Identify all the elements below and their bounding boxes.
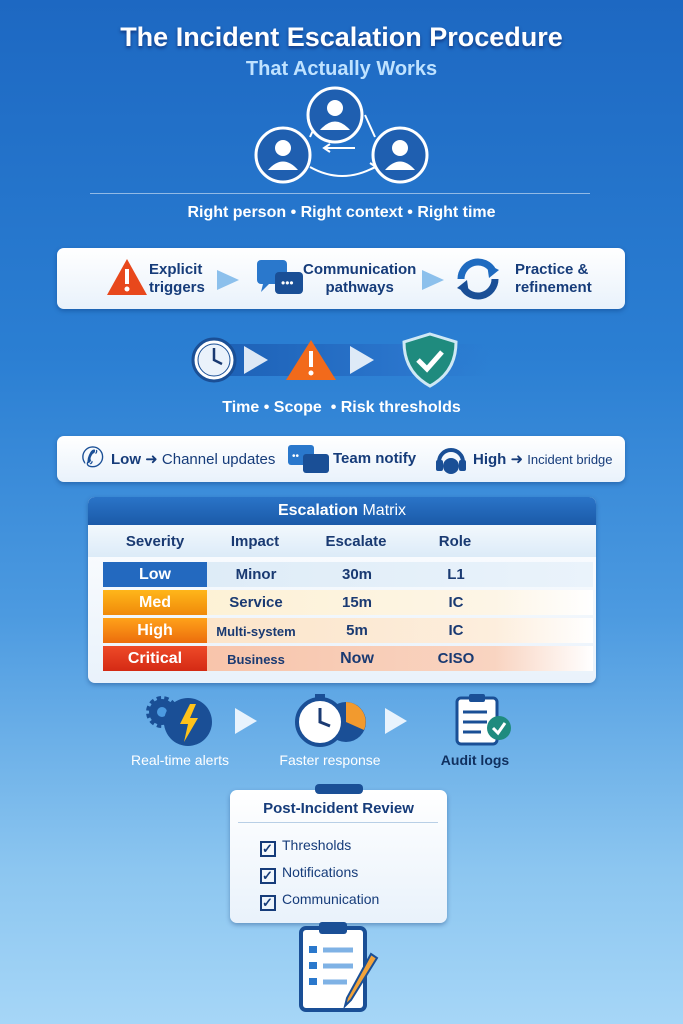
checklist: Thresholds <box>282 837 351 853</box>
icon: shield <box>402 332 458 388</box>
row: critical: Now <box>340 650 374 667</box>
arrow <box>244 346 268 374</box>
label: faster response: Faster response <box>279 752 381 768</box>
text: practice: refinement <box>515 279 592 296</box>
panel: escalation matrix <box>88 497 596 683</box>
arrow <box>350 346 374 374</box>
title: The Incident Escalation Procedure <box>120 22 563 52</box>
row: med: Service <box>229 594 283 611</box>
icon: people network <box>254 86 428 184</box>
row: low: L1 <box>447 566 465 583</box>
row: med <box>103 590 593 615</box>
row: critical: Critical <box>128 650 182 667</box>
icon: chat <box>257 260 303 294</box>
row: critical <box>103 646 593 671</box>
text: explicit triggers: Explicit <box>149 261 202 278</box>
text: practice: Practice & <box>515 261 588 278</box>
flow: outcomes <box>131 694 511 768</box>
checklist: ✓ <box>262 868 273 883</box>
row: high: 5m <box>346 622 368 639</box>
icon: refresh cycle <box>457 258 499 300</box>
checklist: Notifications <box>282 864 358 880</box>
icon: chat <box>288 445 329 473</box>
text: high bridge: High ➜ Incident bridge <box>473 451 613 468</box>
icon: stopwatch <box>295 694 366 747</box>
row: high: Multi-system <box>216 624 296 639</box>
row: critical: CISO <box>438 650 474 667</box>
text: communication pathways <box>303 261 416 296</box>
checklist: Communication <box>282 891 379 907</box>
text: team notify: Team notify <box>333 450 416 467</box>
icon: warning <box>286 340 336 380</box>
arrow <box>385 708 407 734</box>
checklist <box>260 837 379 911</box>
review heading: Post-Incident Review <box>263 800 414 817</box>
row: critical: Business <box>227 652 285 667</box>
icon: headset <box>436 448 466 474</box>
arrow <box>235 708 257 734</box>
text: practice <box>515 261 592 296</box>
column headers: Role <box>439 533 471 550</box>
matrix header: Escalation Matrix <box>278 502 406 519</box>
icon: warning <box>107 259 147 295</box>
icon: clock <box>192 338 236 382</box>
row: med: Med <box>139 594 171 611</box>
label: audit logs: Audit logs <box>441 752 509 768</box>
text: explicit triggers <box>149 261 205 296</box>
row: med: 15m <box>342 594 372 611</box>
row: low <box>103 562 593 587</box>
column headers: Severity <box>126 533 184 550</box>
checklist: ✓ <box>262 841 273 856</box>
icon: chat: ••• <box>281 276 294 290</box>
column headers: Impact <box>231 533 279 550</box>
row: low: 30m <box>342 566 372 583</box>
row: high: High <box>137 622 173 639</box>
panel: channels <box>57 436 625 482</box>
text: explicit triggers: triggers <box>149 279 205 296</box>
label: real-time alerts: Real-time alerts <box>131 752 229 768</box>
icon: gear bolt <box>146 696 212 746</box>
column headers <box>88 525 596 557</box>
arrow <box>422 270 444 290</box>
panel: pillars <box>57 248 625 309</box>
text: communication pathways: Communication <box>303 261 416 278</box>
tagline: thresholds: Time • Scope • Risk thresholds <box>222 399 461 416</box>
panel: post-incident review <box>230 790 447 923</box>
column headers: Escalate <box>326 533 386 550</box>
row: low: Minor <box>236 566 276 583</box>
row: med: IC <box>448 594 464 611</box>
row: high: IC <box>448 622 464 639</box>
arrow <box>217 270 239 290</box>
icon: clipboard with pencil <box>299 922 378 1012</box>
flow: time scope risk <box>192 332 458 388</box>
icon: chat: •• <box>292 451 300 462</box>
text: communication pathways: pathways <box>325 279 394 296</box>
checklist: ✓ <box>262 895 273 910</box>
icon: audit clipboard <box>456 694 511 746</box>
matrix header <box>88 497 596 525</box>
text: low channel: Low ➜ Channel updates <box>111 451 275 468</box>
row: low: Low <box>139 566 171 583</box>
row: high <box>103 618 593 643</box>
subtitle: That Actually Works <box>246 58 437 80</box>
icon: phone: ✆ <box>81 442 104 473</box>
tagline: Right person • Right context • Right time <box>187 204 496 221</box>
